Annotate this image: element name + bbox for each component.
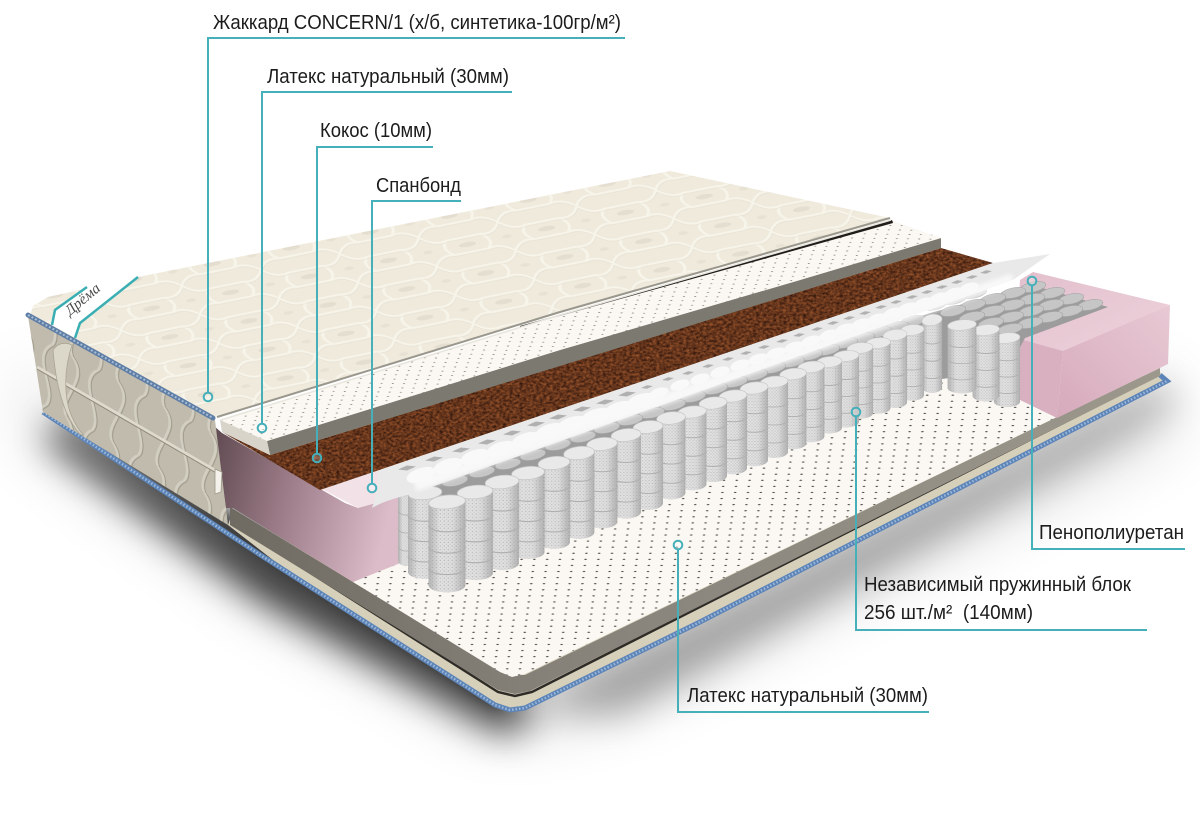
base edge with blue piping bbox=[43, 372, 1167, 710]
callout: polyurethane foam: Пенополиуретан bbox=[1039, 522, 1184, 544]
callout: bottom latex bbox=[674, 541, 929, 712]
callout: spunbond: Спанбонд bbox=[376, 175, 461, 197]
springs, front row bbox=[398, 313, 1021, 592]
jacquard top cover bbox=[30, 171, 891, 420]
foam side, left bbox=[214, 426, 403, 582]
spunbond pattern bbox=[398, 270, 992, 486]
spring block inner shade bbox=[402, 285, 1108, 545]
spring tops, back rows bbox=[441, 279, 1104, 489]
callout: top latex: Латекс натуральный (30мм) bbox=[267, 66, 509, 88]
handle strap bbox=[53, 343, 84, 436]
quilted side panel bbox=[28, 316, 228, 525]
mattress bbox=[28, 171, 1170, 710]
spunbond sheet bbox=[372, 254, 1050, 508]
callout: polyurethane foam bbox=[1028, 277, 1185, 549]
brand tag bbox=[52, 277, 138, 338]
callout: top latex bbox=[258, 66, 512, 432]
callout: coconut: Кокос (10мм) bbox=[320, 120, 432, 142]
pink foam block, right bbox=[1012, 272, 1170, 418]
callout: bottom latex: Латекс натуральный (30мм) bbox=[687, 685, 928, 707]
callout: spring block bbox=[852, 408, 1147, 630]
callout: spring block: 256 шт./м² (140мм) bbox=[864, 602, 1033, 624]
callout: jacquard bbox=[204, 12, 625, 401]
upper latex layer bbox=[220, 220, 941, 455]
callout: spunbond bbox=[368, 175, 461, 492]
floor shadow bbox=[15, 340, 1175, 735]
callout: jacquard: Жаккард CONCERN/1 (х/б, синтетика-100гр/м²) bbox=[213, 12, 621, 34]
blue top piping bbox=[28, 315, 213, 418]
callout: spring block: Независимый пружинный блок bbox=[864, 574, 1131, 596]
zipper pull bbox=[215, 469, 222, 494]
coconut layer bbox=[222, 248, 993, 490]
spring block bbox=[398, 279, 1108, 592]
brand logo: Дрёма bbox=[61, 281, 104, 320]
bottom latex layer bbox=[353, 375, 1057, 677]
foam top, left bbox=[322, 470, 412, 508]
callout: coconut bbox=[313, 120, 433, 462]
bottom latex gray side bbox=[230, 368, 1160, 694]
